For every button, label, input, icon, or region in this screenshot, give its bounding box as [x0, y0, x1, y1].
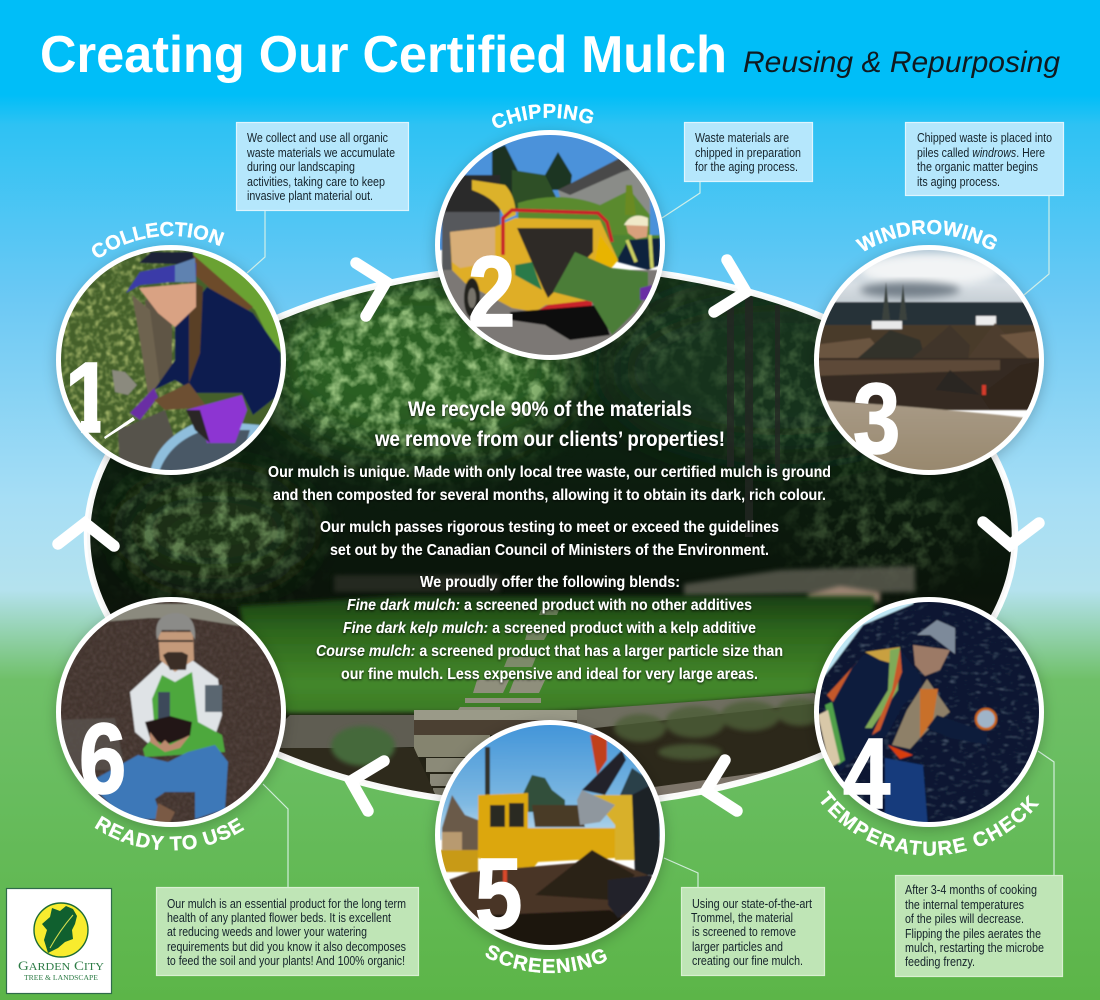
leader lines for callouts	[247, 182, 1054, 887]
callout: collection: waste materials we accumulate	[246, 145, 395, 160]
callout: windrowing: piles called windrows. Here	[917, 145, 1045, 160]
callout: collection: We collect and use all organic	[247, 130, 388, 145]
label: temperature check: TEMPERATURE CHECK	[820, 790, 1040, 856]
step 1: collection	[49, 222, 288, 476]
number 3: 3	[853, 362, 900, 475]
callout: screening: creating our fine mulch.	[692, 953, 803, 968]
title banner	[40, 26, 1060, 84]
retaining wall and steps	[280, 715, 414, 750]
callout: chipping: Waste materials are	[695, 130, 789, 145]
callout: temperature check: After 3-4 months of cooking	[905, 882, 1037, 897]
photo: man holding mulch	[55, 597, 287, 829]
arrow: collection to chipping	[356, 263, 386, 316]
lawn	[239, 596, 874, 713]
callout: windrowing: its aging process.	[917, 174, 1000, 189]
callout: screening: is screened to remove	[692, 924, 796, 939]
callout: chipping: chipped in preparation	[695, 145, 801, 160]
callout: temperature check: the internal temperatures	[905, 897, 1024, 912]
callout: temperature check	[896, 876, 1062, 976]
logo tagline: TREE & LANDSCAPE	[24, 973, 98, 982]
number 5: 5	[475, 837, 522, 950]
headline: we remove from our clients’ properties!	[374, 428, 725, 451]
label: chipping: CHIPPING	[492, 104, 594, 128]
paragraph: testing: set out by the Canadian Council of Ministers of the Environment.	[330, 542, 769, 559]
callout: collection: activities, taking care to keep	[247, 174, 385, 189]
label: windrowing: WINDROWING	[855, 220, 997, 252]
photo: windrow piles	[813, 245, 1045, 475]
label: screening: SCREENING	[486, 945, 607, 974]
callout: ready to use: Our mulch is an essential product for the long term	[167, 896, 406, 911]
callout: ready to use: requirements but did you know it also decomposes	[167, 939, 406, 954]
headline	[374, 398, 725, 451]
callout: windrowing	[906, 122, 1064, 196]
paragraph: blends: our fine mulch. Less expensive and ideal for very large areas.	[341, 666, 758, 683]
label: collection: COLLECTION	[92, 222, 224, 258]
photo: woman collecting plants	[56, 245, 286, 475]
step 5: screening	[430, 719, 670, 974]
paragraph: blends	[316, 574, 783, 683]
callout: chipping: for the aging process.	[695, 159, 798, 174]
arrow: screening to ready to use	[351, 761, 384, 811]
headline: We recycle 90% of the materials	[408, 398, 692, 421]
callout: windrowing: Chipped waste is placed into	[917, 130, 1052, 145]
callout: collection: during our landscaping	[247, 159, 355, 174]
cycle ellipse outline	[87, 266, 1015, 806]
paragraph: blends: We proudly offer the following blends:	[420, 574, 680, 591]
paragraph: unique mulch: and then composted for several months, allowing it to obtain its dark, rich colour.	[273, 487, 826, 504]
paragraph: unique mulch	[268, 464, 831, 504]
number 2: 2	[468, 235, 515, 348]
step 2: chipping	[428, 104, 672, 368]
central garden photo ellipse	[85, 262, 1015, 806]
callout: temperature check: mulch, restarting the microbe	[905, 940, 1044, 955]
callout: ready to use: health of any planted flower beds. It is excellent	[167, 910, 391, 925]
paragraph: unique mulch: Our mulch is unique. Made with only local tree waste, our certified mulch is ground	[268, 464, 831, 481]
step 3: windrowing	[814, 220, 1051, 475]
callout: chipping	[684, 122, 812, 182]
number 6: 6	[79, 702, 126, 815]
callout: windrowing: the organic matter begins	[917, 159, 1038, 174]
arrow: windrowing to temperature check	[983, 522, 1039, 545]
logo: Garden City Tree & Landscape	[6, 888, 112, 994]
paragraph: blends: Fine dark mulch: a screened product with no other additives	[347, 597, 752, 614]
callout: temperature check: feeding frenzy.	[905, 954, 975, 969]
subtitle: Reusing & Repurposing	[743, 46, 1060, 79]
paragraph: testing: Our mulch passes rigorous testing to meet or exceed the guidelines	[320, 519, 779, 536]
number 4: 4	[843, 717, 891, 830]
step 6: ready to use	[50, 597, 289, 850]
arrow: chipping to windrowing	[714, 260, 746, 312]
callout: screening: Trommel, the material	[691, 910, 793, 925]
arrow: temperature check to screening	[706, 760, 737, 811]
callout: collection	[236, 122, 408, 210]
callout: ready to use: at reducing weeds and lower your watering	[167, 924, 367, 939]
callout: ready to use: to feed the soil and your plants! And 100% organic!	[167, 953, 405, 968]
photo: wood chipper	[435, 130, 665, 370]
paragraph: blends: Course mulch: a screened product that has a larger particle size than	[316, 643, 783, 660]
icon: oak leaf in yellow circle	[34, 903, 88, 957]
logo wordmark: GARDEN CITY	[18, 958, 104, 973]
callout: screening: Using our state-of-the-art	[692, 896, 812, 911]
title: Creating Our Certified Mulch	[40, 26, 727, 84]
callout: screening	[682, 888, 824, 976]
central message text	[268, 398, 831, 683]
photo: worker checking temperature	[813, 597, 1045, 828]
arrow: ready to use to collection	[58, 523, 114, 546]
callout: temperature check: of the piles will decrease.	[905, 911, 1024, 926]
number 1: 1	[65, 341, 112, 454]
callout: screening: larger particles and	[692, 939, 783, 954]
callout: collection: invasive plant material out.	[247, 188, 373, 203]
paragraph: blends: Fine dark kelp mulch: a screened product with a kelp additive	[343, 620, 756, 637]
label: ready to use: READY TO USE	[94, 816, 244, 850]
callout: ready to use	[156, 888, 418, 976]
photo: trommel screener	[435, 720, 667, 960]
step 4: temperature check	[812, 597, 1050, 856]
callout: temperature check: Flipping the piles aerates the	[905, 926, 1041, 941]
paragraph: testing	[320, 519, 779, 559]
